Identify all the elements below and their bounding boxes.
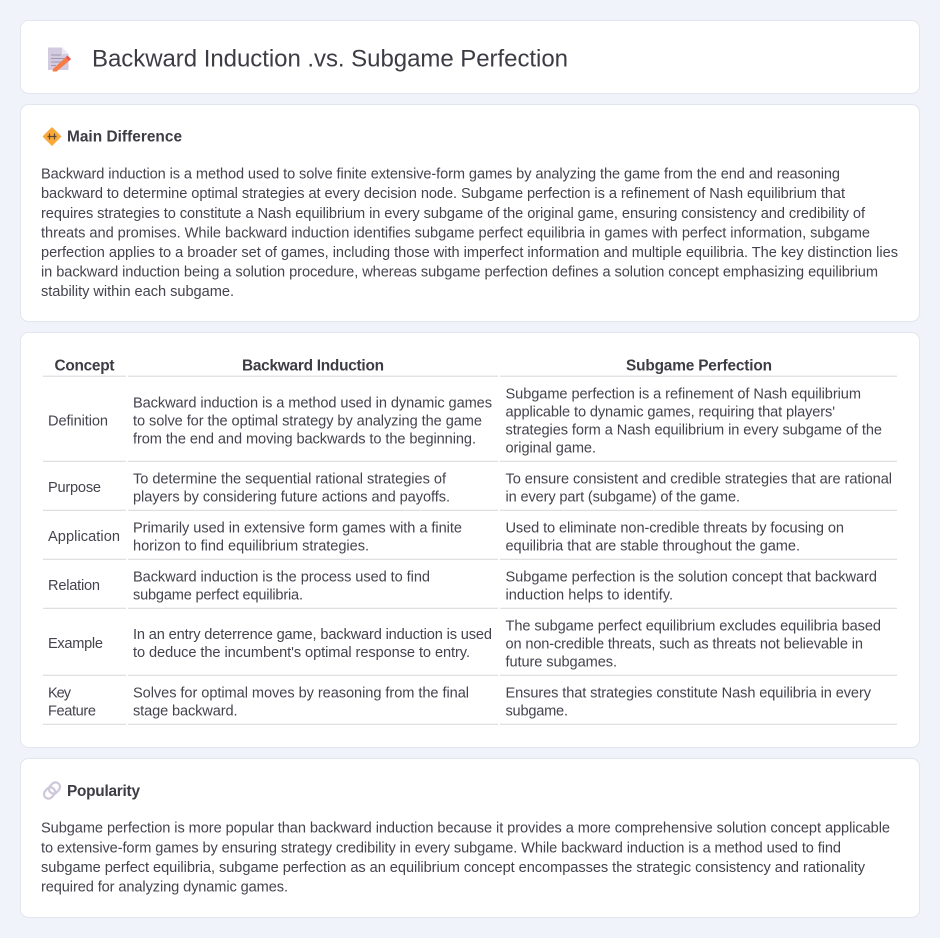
row: purpose: To ensure consistent and credible strategies that are rational: [506, 471, 892, 487]
row: relation: induction helps to identify.: [506, 587, 673, 603]
text: popularity paragraph: subgame perfect equilibria, subgame perfection as an equilibrium concept encompasses the strategic consistency and rationality: [41, 860, 866, 876]
row: purpose: To determine the sequential rational strategies of: [133, 471, 447, 487]
text: popularity paragraph: required for analyzing dynamic games.: [41, 880, 288, 896]
icon: memo with pencil: [48, 48, 71, 72]
table header row: Backward Induction: [242, 358, 384, 375]
row: definition: to solve for the optimal strategy by analyzing the game: [133, 414, 482, 430]
text: main difference paragraph: requires strategies to constitute a Nash equilibrium in every subgame of the original game, ensuring consistency and credibility of: [41, 206, 866, 222]
text: main difference paragraph: [41, 167, 898, 300]
row: definition: original game.: [506, 440, 596, 456]
row: example: future subgames.: [506, 654, 617, 670]
row: key feature: Ensures that strategies constitute Nash equilibria in every: [506, 685, 872, 701]
row: relation: subgame perfect equilibria.: [133, 587, 303, 603]
row: example: to deduce the incumbent's optimal response to entry.: [133, 645, 470, 661]
text: main difference paragraph: backward to determine optimal strategies at every decision node. Subgame perfection is a refinement of Nash equilibrium that: [41, 186, 845, 202]
row: key feature: Solves for optimal moves by reasoning from the final: [133, 685, 469, 701]
table header row: Concept: [54, 358, 114, 375]
row: example: on non-credible threats, such as threats not believable in: [506, 636, 863, 652]
row: example: The subgame perfect equilibrium excludes equilibria based: [506, 618, 881, 634]
row: purpose: Purpose: [48, 480, 101, 496]
row: key feature: [43, 685, 897, 725]
row: key feature: subgame.: [506, 703, 568, 719]
row: definition: Backward induction is a method used in dynamic games: [133, 396, 492, 412]
text: popularity paragraph: to extensive-form games by ensuring strategy credibility in every subgame. While backward induction is a method used to find: [41, 840, 841, 856]
row: application: Primarily used in extensive form games with a finite: [133, 520, 462, 536]
table header row: [43, 358, 897, 377]
row: definition: [43, 386, 897, 462]
row: key feature: Feature: [48, 703, 96, 719]
text: main difference paragraph: stability within each subgame.: [41, 284, 234, 300]
row: relation: Backward induction is the process used to find: [133, 569, 430, 585]
heading: main difference: Main Difference: [67, 128, 182, 146]
row: relation: [43, 569, 897, 609]
text: popularity paragraph: Subgame perfection is more popular than backward induction because it provides a more comprehensive solution concept applicable: [41, 821, 890, 837]
text: main difference paragraph: threats and promises. While backward induction identifies subgame perfect equilibria in games with perfect information, subgame: [41, 225, 870, 241]
heading: popularity: Popularity: [67, 783, 140, 800]
panel: popularity: [20, 758, 920, 918]
row: application: Used to eliminate non-credible threats by focusing on: [506, 520, 844, 536]
text: main difference paragraph: Backward induction is a method used to solve finite extensive-form games by analyzing the game from the end and reasoning: [41, 167, 840, 183]
row: definition: Subgame perfection is a refinement of Nash equilibrium: [506, 386, 861, 402]
row: definition: from the end and moving backwards to the beginning.: [133, 432, 476, 448]
row: purpose: [43, 471, 897, 511]
text: popularity paragraph: [41, 821, 890, 896]
title: Backward Induction .vs. Subgame Perfection: [92, 46, 568, 72]
icon: orange diamond: [44, 128, 60, 145]
row: application: Application: [48, 529, 120, 545]
icon: chain link: [42, 781, 62, 800]
row: example: In an entry deterrence game, backward induction is used: [133, 627, 492, 643]
table header row: Subgame Perfection: [626, 358, 772, 375]
row: definition: strategies form a Nash equilibrium in every subgame of the: [506, 422, 882, 438]
row: relation: Subgame perfection is the solution concept that backward: [506, 569, 877, 585]
row: application: [43, 520, 897, 560]
text: main difference paragraph: in backward induction being a solution procedure, whereas subgame perfection defines a solution concept emphasizing equilibrium: [41, 265, 878, 281]
row: example: Example: [48, 636, 103, 652]
row: key feature: Key: [48, 685, 72, 701]
row: purpose: players by considering future actions and payoffs.: [133, 489, 450, 505]
row: definition: Definition: [48, 414, 108, 430]
panel: main difference: [20, 104, 920, 322]
row: definition: applicable to dynamic games, requiring that players': [506, 404, 835, 420]
row: purpose: in every part (subgame) of the game.: [506, 489, 740, 505]
row: key feature: stage backward.: [133, 703, 238, 719]
row: example: [43, 618, 897, 676]
text: main difference paragraph: perfection applies to a broader set of games, including those with imperfect information and multiple equilibria. The key distinction lies: [41, 245, 898, 261]
row: application: horizon to find equilibrium strategies.: [133, 538, 369, 554]
panel: header: [20, 20, 920, 94]
row: relation: Relation: [48, 578, 100, 594]
panel: comparison table: [20, 332, 920, 748]
row: application: equilibria that are stable throughout the game.: [506, 538, 800, 554]
